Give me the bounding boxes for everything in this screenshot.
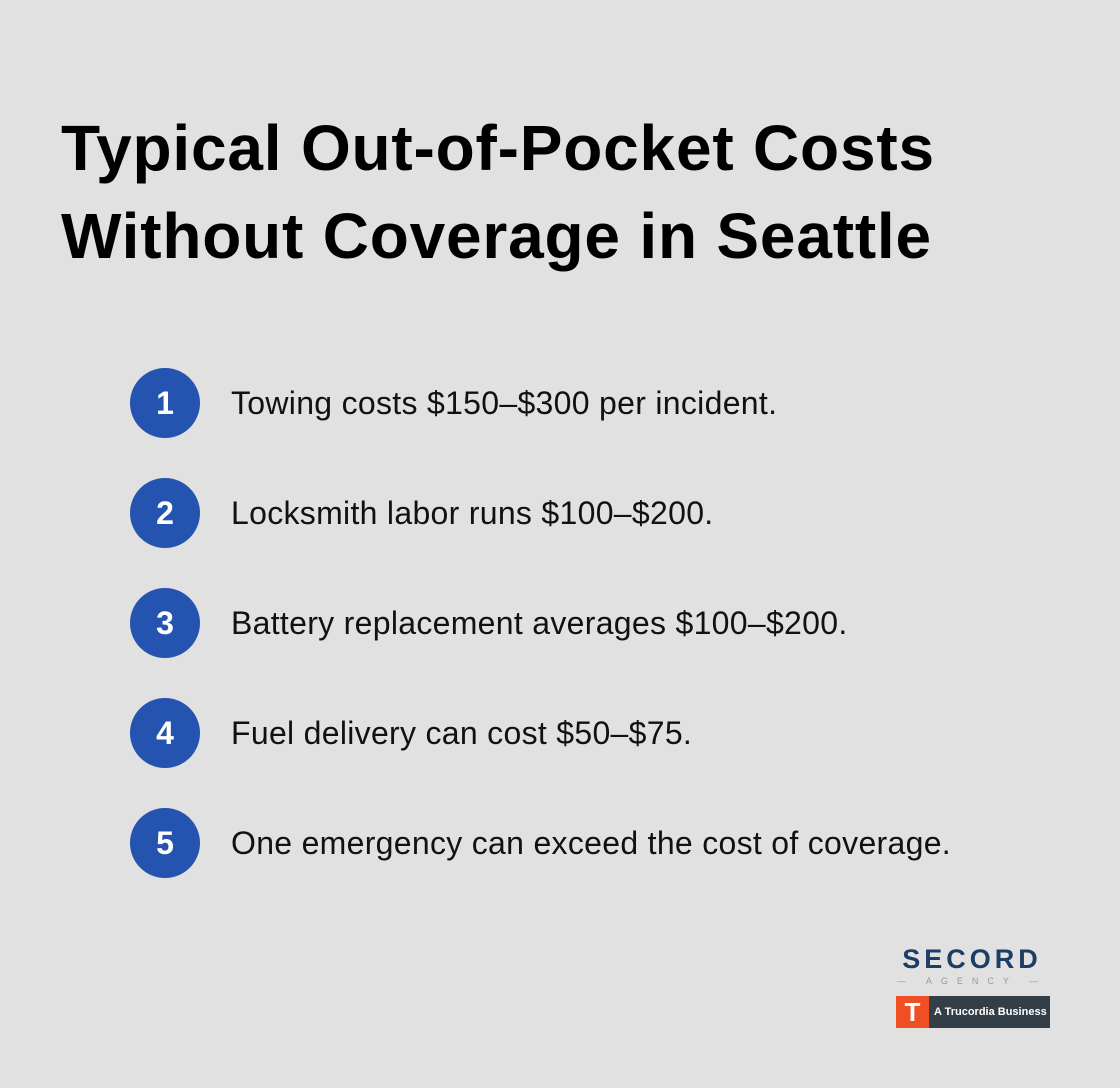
list item 4 <box>130 698 692 768</box>
logo: Secord Agency: A Trucordia Business <box>934 1006 1047 1018</box>
list item 5: 5 <box>156 825 174 861</box>
list item 5: One emergency can exceed the cost of coverage. <box>231 825 951 861</box>
logo: Secord Agency: SECORD <box>902 944 1042 974</box>
list item 3 <box>130 588 848 658</box>
list item 3: 3 <box>156 605 174 641</box>
list item 5 <box>130 808 951 878</box>
logo: Secord Agency <box>896 944 1050 1028</box>
logo: Secord Agency: T <box>905 997 920 1027</box>
list item 1: Towing costs $150–$300 per incident. <box>231 385 777 421</box>
list item 1: 1 <box>156 385 174 421</box>
list item 2: Locksmith labor runs $100–$200. <box>231 495 714 531</box>
title: Typical Out-of-Pocket Costs <box>61 112 935 184</box>
list item 4: 4 <box>156 715 174 751</box>
title: Without Coverage in Seattle <box>61 200 932 272</box>
list item 1 <box>130 368 777 438</box>
list item 2 <box>130 478 714 548</box>
list item 4: Fuel delivery can cost $50–$75. <box>231 715 692 751</box>
list item 2: 2 <box>156 495 174 531</box>
title <box>61 112 935 272</box>
logo: Secord Agency: — AGENCY — <box>897 976 1047 986</box>
list item 3: Battery replacement averages $100–$200. <box>231 605 848 641</box>
